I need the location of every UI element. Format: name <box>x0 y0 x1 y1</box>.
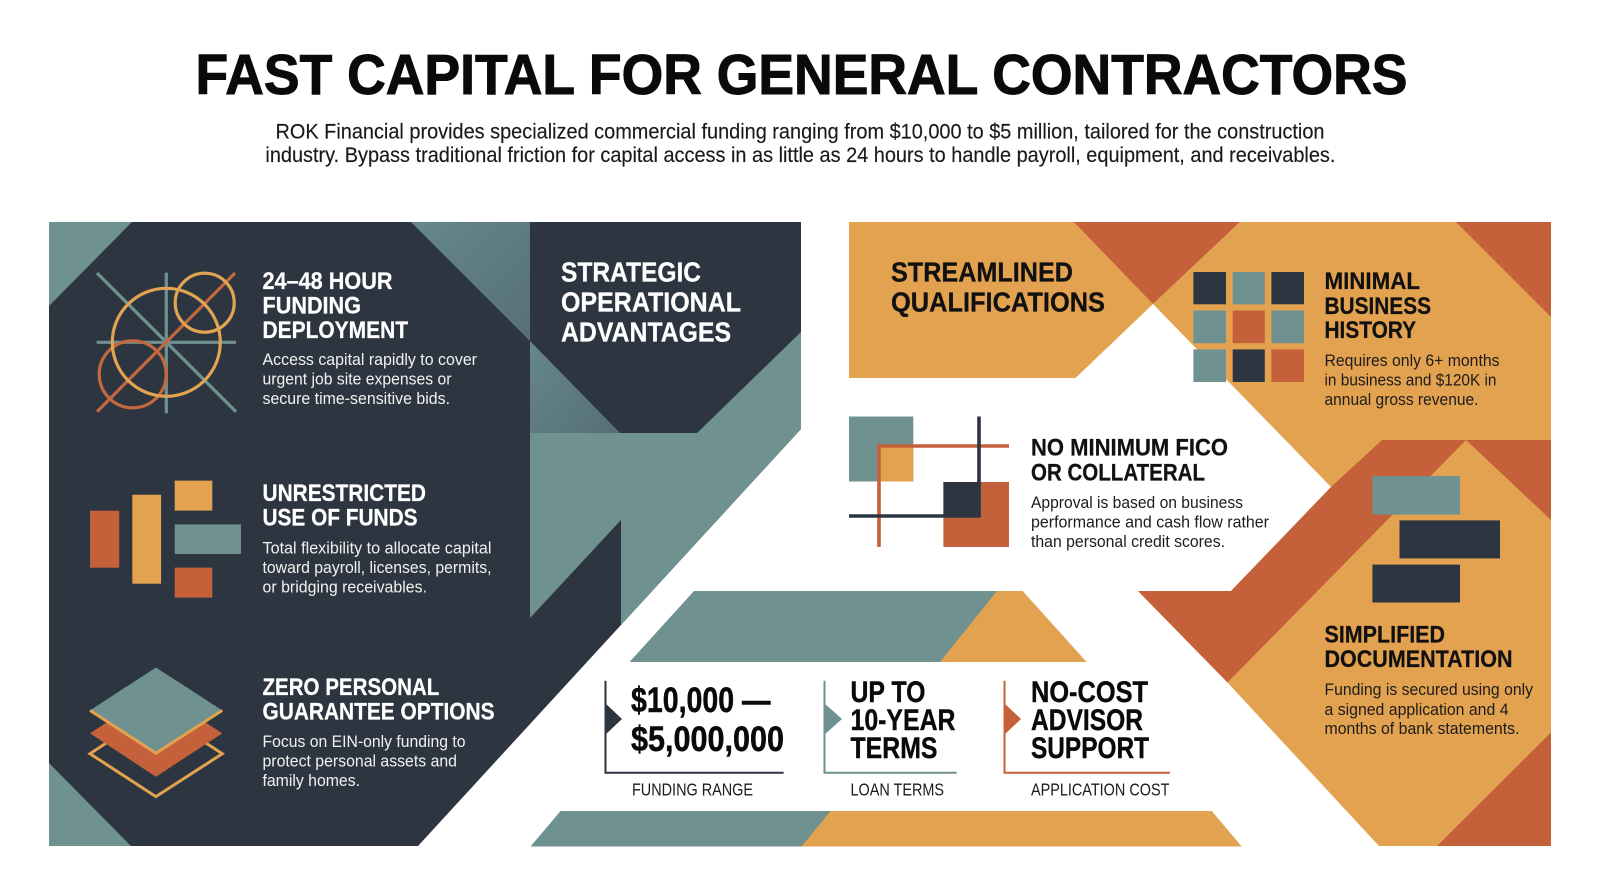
text block: minimal business history: annual gross revenue. <box>1324 390 1478 409</box>
text block: no minimum fico or collateral <box>1031 435 1269 551</box>
heading: streamlined qualifications: STREAMLINED <box>891 256 1073 288</box>
stat: funding range: $10,000 — <box>631 681 770 720</box>
text block: unrestricted use of funds <box>262 480 492 596</box>
icon: overlapping squares and lines <box>849 416 1009 547</box>
text block: zero personal guarantee options: GUARANTEE OPTIONS <box>262 698 494 726</box>
text block: 24-48 hour funding deployment: secure time-sensitive bids. <box>262 389 450 408</box>
text block: unrestricted use of funds: toward payroll, licenses, permits, <box>262 558 492 577</box>
intro text: ROK Financial provides specialized commercial funding ranging from $10,000 to $5 million, tailored for the construction <box>276 120 1324 144</box>
heading: strategic operational advantages <box>561 256 741 348</box>
panel: streamlined qualifications <box>849 222 1551 846</box>
stat: loan terms: UP TO <box>850 676 926 709</box>
text block: zero personal guarantee options: family homes. <box>262 771 360 790</box>
heading: streamlined qualifications: QUALIFICATIONS <box>891 286 1105 318</box>
heading: strategic operational advantages: ADVANTAGES <box>561 316 731 348</box>
stat: loan terms <box>824 676 957 800</box>
lower trapezoid band <box>530 811 1242 846</box>
text block: 24-48 hour funding deployment: FUNDING <box>262 292 361 320</box>
text block: minimal business history: in business and $120K in <box>1324 371 1496 390</box>
text block: zero personal guarantee options: Focus on EIN-only funding to <box>262 732 466 751</box>
text block: simplified documentation: a signed application and 4 <box>1324 700 1508 719</box>
text block: simplified documentation <box>1324 622 1533 738</box>
intro text <box>265 120 1335 167</box>
stat: application cost: NO-COST <box>1031 676 1148 709</box>
intro text: industry. Bypass traditional friction for capital access in as little as 24 hours to handle payroll, equipment, and receivables. <box>265 144 1335 167</box>
text block: minimal business history: HISTORY <box>1324 317 1416 344</box>
text block: simplified documentation: Funding is secured using only <box>1324 680 1533 699</box>
text block: simplified documentation: SIMPLIFIED <box>1324 622 1445 648</box>
text block: unrestricted use of funds: USE OF FUNDS <box>262 504 418 532</box>
text block: unrestricted use of funds: UNRESTRICTED <box>262 480 426 507</box>
text block: unrestricted use of funds: or bridging receivables. <box>262 577 427 596</box>
text block: no minimum fico or collateral: NO MINIMUM FICO <box>1031 435 1228 462</box>
stat: loan terms: LOAN TERMS <box>850 780 944 800</box>
stat: application cost: ADVISOR <box>1031 704 1143 737</box>
text block: 24-48 hour funding deployment: urgent job site expenses or <box>262 370 452 389</box>
stat: application cost: SUPPORT <box>1031 732 1149 765</box>
icon: allocation blocks <box>90 481 241 598</box>
text block: zero personal guarantee options <box>262 674 494 790</box>
text block: zero personal guarantee options: protect personal assets and <box>262 752 457 770</box>
text block: minimal business history: Requires only 6+ months <box>1324 351 1500 370</box>
panel: strategic operational advantages <box>49 222 801 846</box>
text block: simplified documentation: months of bank statements. <box>1324 719 1520 738</box>
stat: application cost: APPLICATION COST <box>1031 780 1170 800</box>
heading: strategic operational advantages: OPERATIONAL <box>561 286 741 318</box>
heading: strategic operational advantages: STRATEGIC <box>561 256 701 288</box>
icon: document bars <box>1372 476 1500 602</box>
text block: minimal business history: BUSINESS <box>1324 293 1431 320</box>
text block: unrestricted use of funds: Total flexibility to allocate capital <box>262 538 492 558</box>
stat: funding range: FUNDING RANGE <box>632 780 753 800</box>
upper trapezoid band <box>630 591 1086 662</box>
icon: circles and crosshair <box>97 273 236 413</box>
stat: loan terms: TERMS <box>850 732 938 765</box>
title: FAST CAPITAL FOR GENERAL CONTRACTORS <box>196 43 1408 107</box>
text block: no minimum fico or collateral: than personal credit scores. <box>1031 532 1225 551</box>
stat: funding range <box>605 681 784 800</box>
text block: minimal business history <box>1324 268 1500 409</box>
heading: streamlined qualifications <box>891 256 1105 318</box>
text block: minimal business history: MINIMAL <box>1324 268 1420 295</box>
text block: no minimum fico or collateral: performance and cash flow rather <box>1031 512 1269 532</box>
stat: loan terms: 10-YEAR <box>850 704 956 737</box>
icon: square grid <box>1193 272 1304 382</box>
stat: application cost <box>1004 676 1170 800</box>
icon: stacked layers <box>90 668 222 797</box>
text block: 24-48 hour funding deployment: Access capital rapidly to cover <box>262 350 477 369</box>
text block: 24-48 hour funding deployment: DEPLOYMENT <box>262 317 408 344</box>
text block: 24-48 hour funding deployment <box>262 268 477 408</box>
stat: funding range: $5,000,000 <box>631 720 784 759</box>
text block: 24-48 hour funding deployment: 24–48 HOUR <box>262 268 392 295</box>
text block: no minimum fico or collateral: OR COLLATERAL <box>1031 460 1205 486</box>
text block: zero personal guarantee options: ZERO PERSONAL <box>262 674 439 701</box>
text block: simplified documentation: DOCUMENTATION <box>1324 646 1512 673</box>
text block: no minimum fico or collateral: Approval is based on business <box>1031 493 1243 512</box>
